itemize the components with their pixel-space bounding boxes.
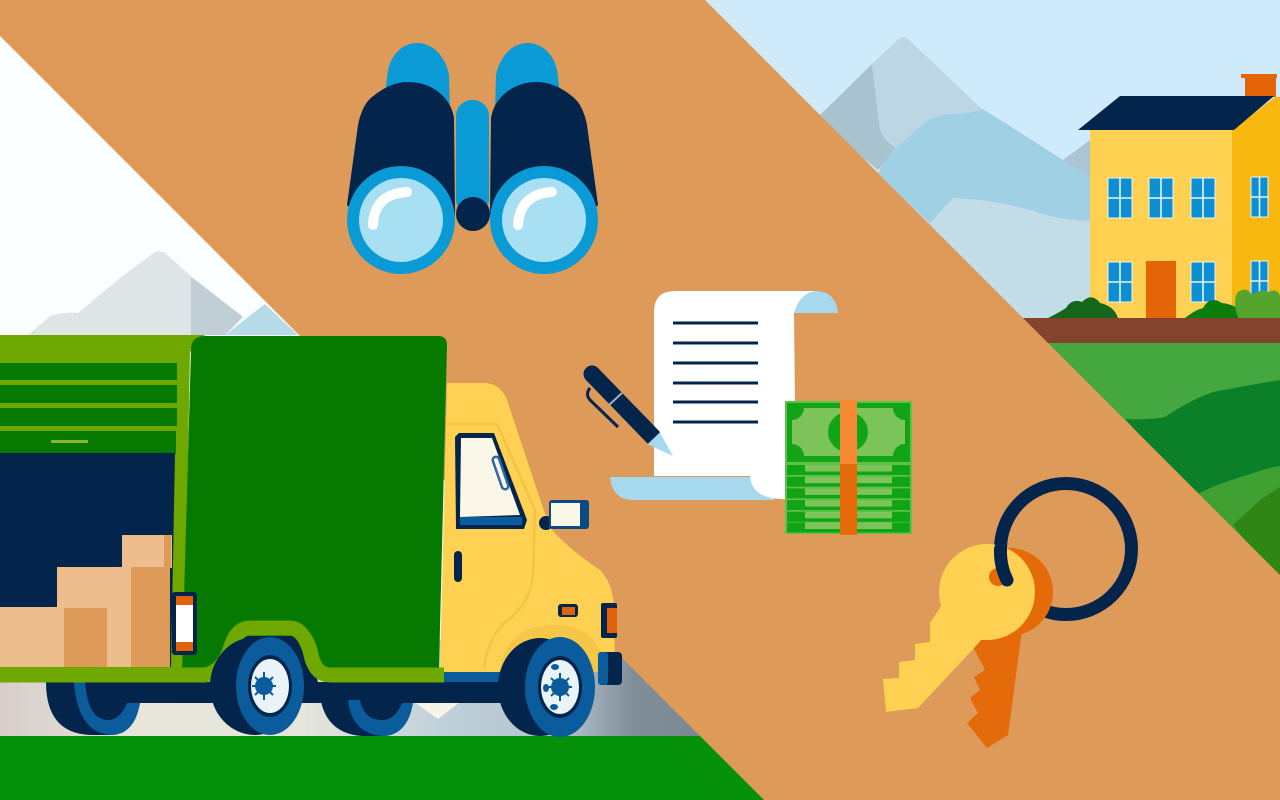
- house: [1048, 74, 1280, 318]
- icon: keys on ring: [883, 484, 1132, 748]
- background: left mountains: [28, 251, 298, 335]
- yellow key hole: [989, 568, 1007, 586]
- truck chassis: [120, 682, 520, 703]
- cab window: [455, 433, 527, 529]
- yellow key: [883, 544, 1035, 712]
- icon: pen: [584, 366, 673, 456]
- door: [1146, 261, 1176, 318]
- background: white ground patch: [414, 702, 460, 719]
- truck cab: [440, 383, 615, 672]
- key ring: [1000, 484, 1132, 614]
- house side wall: [1232, 97, 1280, 318]
- wing mirror: [539, 500, 589, 530]
- side marker light: [558, 604, 578, 617]
- foreground: green ground: [0, 736, 780, 800]
- moving truck: [0, 335, 622, 737]
- banknote edges: [787, 465, 910, 532]
- rear axle wheel: left: [46, 682, 140, 735]
- rear axle wheel: right: [319, 682, 413, 736]
- stack base: [785, 401, 912, 534]
- chimney: [1241, 74, 1277, 97]
- headlight: [601, 603, 617, 638]
- scroll bottom curl: [610, 477, 775, 500]
- background: right sky: [700, 0, 1280, 345]
- background: road band behind truck: [0, 640, 720, 737]
- ring front section: [1000, 549, 1007, 580]
- right lens: [490, 166, 598, 274]
- background: left sky: [0, 0, 700, 700]
- door handle: [454, 551, 462, 582]
- left lens: [347, 166, 455, 274]
- cab sill: [444, 672, 522, 682]
- cargo opening: [0, 453, 175, 667]
- wheel arch interior: [212, 636, 318, 682]
- paper band: [840, 400, 857, 535]
- background: brown soil strip: [1000, 318, 1280, 343]
- middle wheel: [210, 637, 304, 735]
- bushes: [1048, 290, 1280, 318]
- house front wall: [1090, 130, 1233, 318]
- cargo frame: [0, 335, 205, 668]
- icon: contract document: [610, 291, 838, 500]
- icon: stack of money: [780, 396, 917, 535]
- background: right green hills: [1020, 343, 1280, 587]
- cargo box side panel: [182, 336, 447, 668]
- text lines: [673, 323, 758, 422]
- upper windows: [1108, 177, 1268, 218]
- roof: [1078, 96, 1274, 130]
- front wheel: [498, 637, 595, 737]
- rear reflector: [172, 592, 197, 655]
- paper sheet: [654, 291, 817, 499]
- orange key: [965, 548, 1053, 748]
- binocular centre bridge: [456, 100, 489, 215]
- roller door slats: [0, 363, 177, 454]
- icon: binoculars: [347, 43, 598, 274]
- cab wheel arch and door lines: [447, 424, 606, 672]
- scroll top curl: [793, 291, 838, 313]
- background: right mountains: [815, 37, 1090, 320]
- binocular barrels: [347, 82, 598, 240]
- cardboard boxes: [0, 535, 172, 667]
- front bumper: [598, 652, 622, 685]
- truck bed trim: [0, 628, 444, 675]
- binocular hinge: [456, 197, 490, 231]
- lower windows: [1108, 261, 1268, 302]
- binocular eyepieces: [383, 43, 562, 115]
- top banknote: [787, 403, 910, 462]
